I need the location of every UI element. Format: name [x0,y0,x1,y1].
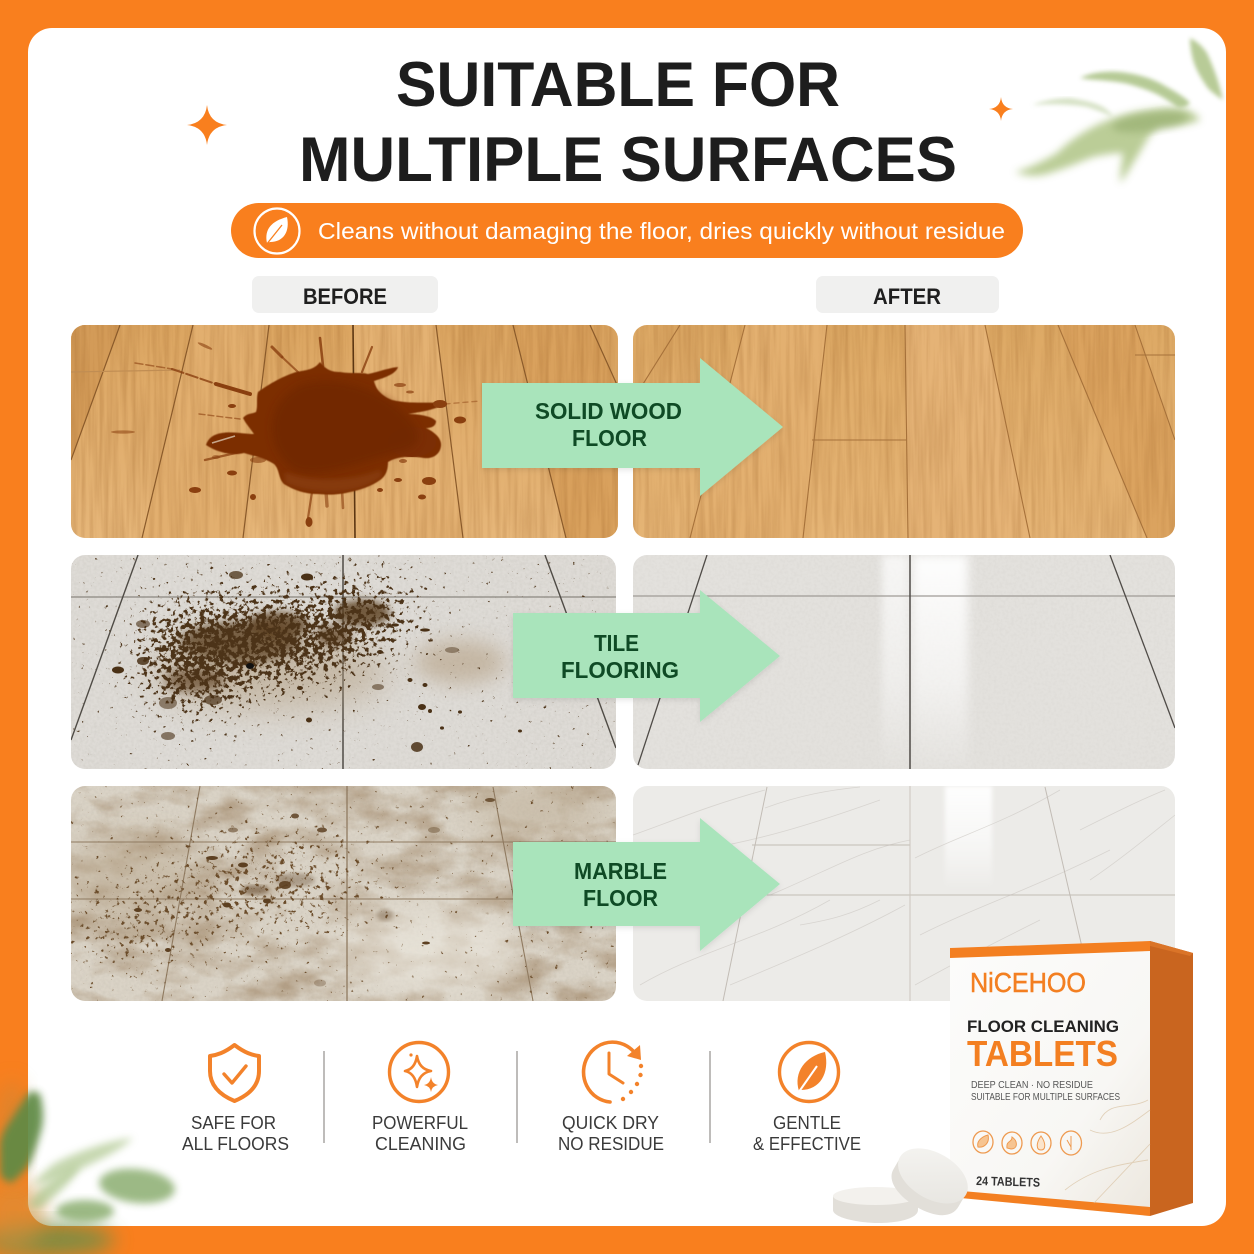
icon: shield [210,1045,259,1101]
box description: DEEP CLEAN · NO RESIDUE [971,1080,1093,1091]
grime speckles [135,585,420,708]
caption: & EFFECTIVE [753,1133,861,1154]
caption: NO RESIDUE [558,1133,664,1154]
after tab [816,276,999,313]
title: SUITABLE FOR [396,50,840,120]
feature: quick dry no residue [558,1042,664,1154]
panel: marble after [633,786,1175,1001]
arrow: tile flooring: FLOORING [561,657,679,683]
icon: sparkles [390,1042,448,1102]
tablets [833,1137,977,1225]
icon: left sparkle [187,105,227,145]
caption [182,1112,289,1154]
tilted tablet [883,1137,977,1225]
subtitle text: Cleans without damaging the floor, dries quickly without residue [318,218,1005,244]
panel: marble before [60,780,616,1001]
box front [950,941,1150,1216]
grime stain [112,571,522,752]
arrow: marble floor: MARBLE [574,858,667,884]
oil stain splash [111,338,480,527]
panel: tile after [633,555,1175,769]
box count: 24 TABLETS [976,1174,1040,1190]
caption: POWERFUL [372,1112,468,1133]
caption [372,1112,468,1154]
feature: gentle and effective [753,1042,861,1154]
box title: FLOOR CLEANING [967,1018,1119,1036]
arrow: marble floor: FLOOR [583,885,658,911]
caption: QUICK DRY [562,1112,659,1133]
product box: TABLETS [967,1033,1118,1074]
decorative blurred leaves: bottom left [0,1080,177,1254]
arrow: marble floor [513,818,780,951]
caption [753,1112,861,1154]
icon: right sparkle [989,97,1013,121]
box side [1150,941,1193,1216]
caption: GENTLE [773,1112,841,1133]
caption: ALL FLOORS [182,1133,289,1154]
subtitle pill [231,203,1023,258]
panel: solid wood before [71,325,618,538]
arrow: solid wood floor: FLOOR [572,425,647,451]
feature: safe for all floors [182,1045,289,1154]
product box [950,941,1193,1216]
after tab: AFTER [873,284,941,309]
arrow: solid wood floor [482,358,783,496]
title: MULTIPLE SURFACES [299,125,957,195]
decorative blurred leaves: top right [1015,38,1223,183]
flat tablet [833,1187,918,1223]
icon: leaf in circle [254,208,300,254]
caption: SAFE FOR [191,1112,276,1133]
box description [971,1080,1120,1103]
panel: tile before [71,555,616,769]
feature: powerful cleaning [372,1042,468,1154]
grime speckles [70,798,495,986]
box icons [973,1131,1082,1155]
before tab [252,276,438,313]
caption [558,1112,664,1154]
before tab: BEFORE [303,284,387,309]
title [299,50,957,195]
caption: CLEANING [375,1133,466,1154]
panel: solid wood after [633,325,1175,538]
arrow: tile flooring: TILE [594,630,639,656]
arrow: solid wood floor: SOLID WOOD [535,398,682,424]
brand logo: NiCEHOO [970,967,1086,998]
arrow: tile flooring [513,590,780,722]
box description: SUITABLE FOR MULTIPLE SURFACES [971,1092,1120,1103]
icon: clock [584,1042,641,1102]
icon: leaf [780,1042,838,1102]
